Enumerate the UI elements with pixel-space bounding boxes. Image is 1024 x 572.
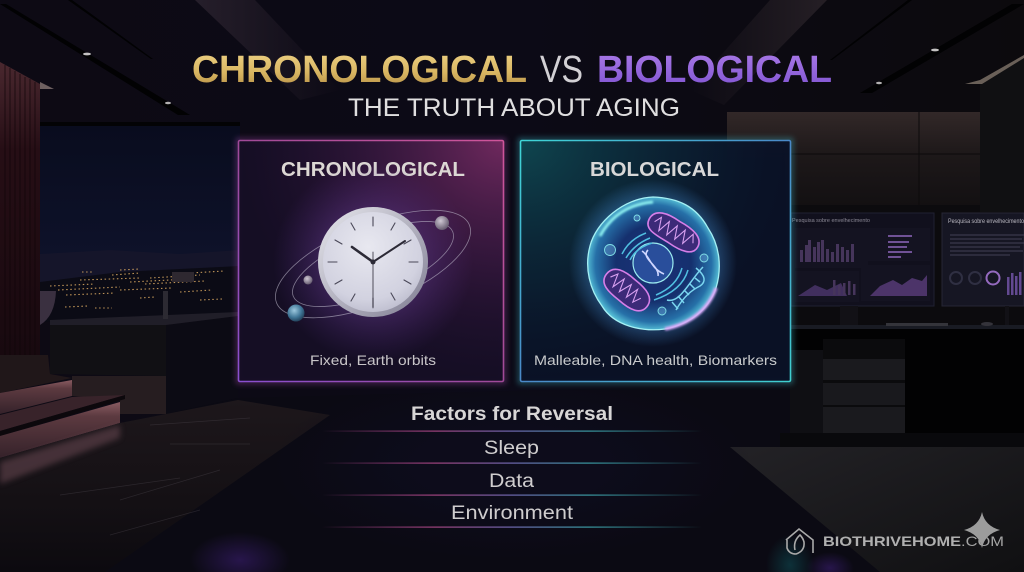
title: VS (540, 49, 583, 91)
factors heading: Factors for Reversal (411, 404, 613, 425)
distant hills (40, 250, 240, 285)
basin (40, 291, 56, 325)
city building glow (172, 272, 194, 282)
brand name: BIOTHRIVEHOME (823, 533, 961, 549)
window with night sky (40, 125, 240, 320)
city dark ground (40, 266, 240, 322)
title (192, 49, 832, 91)
city lights (50, 269, 225, 308)
brand domain: .COM (961, 533, 1004, 549)
mitochondrion lower (598, 264, 656, 316)
right wall (727, 112, 980, 220)
title: CHRONOLOGICAL (192, 49, 527, 91)
marble veins (60, 418, 250, 535)
marble counter (50, 291, 238, 414)
subtitle: THE TRUTH ABOUT AGING (348, 94, 680, 122)
mitochondrion upper (643, 208, 705, 256)
drawers (790, 339, 905, 433)
nucleus (633, 243, 673, 283)
violet floor reflection (806, 552, 854, 572)
lit stairs (0, 380, 125, 458)
left ceiling recessed strips (0, 0, 190, 115)
stair floor reflection (0, 425, 120, 484)
logo (786, 512, 1004, 554)
panel: chronological (238, 140, 504, 382)
factors list (322, 404, 702, 528)
icon: leaf house (786, 529, 813, 554)
floor band behind rug (780, 433, 1024, 447)
tier floor beside column (0, 355, 72, 393)
fluted maroon column (0, 62, 40, 355)
desk with keyboard (790, 306, 1024, 433)
golgi (622, 233, 688, 300)
factor: data: Data (489, 471, 534, 492)
purple floor reflection (190, 532, 290, 572)
ceiling light wedges (195, 0, 827, 105)
right ceiling recessed strips (830, 0, 1024, 93)
title: BIOLOGICAL (597, 49, 832, 91)
panel caption: chronological: Fixed, Earth orbits (310, 352, 436, 368)
grey rug (730, 447, 1024, 572)
divider rule (322, 526, 702, 528)
icon: clock with orbiting planets (262, 162, 484, 362)
dna strand (667, 267, 704, 310)
factor: environment: Environment (451, 503, 574, 524)
divider rule (322, 494, 702, 496)
dark floor (0, 384, 1024, 572)
monitor right (942, 213, 1024, 306)
divider rule (322, 430, 702, 432)
centre list shading (272, 370, 752, 560)
monitor left: Pesquisa sobre envelhecimento (792, 218, 870, 224)
vesicles (604, 215, 708, 315)
panel: biological (520, 140, 791, 382)
teal floor reflection (766, 535, 814, 572)
icon: glowing cell (569, 179, 737, 347)
factor: sleep: Sleep (484, 438, 539, 459)
dark marble pillar (980, 56, 1024, 212)
marble floor panel (0, 400, 330, 572)
panel heading: biological: BIOLOGICAL (590, 159, 719, 181)
panel heading: chronological: CHRONOLOGICAL (281, 159, 465, 181)
monitor left (791, 213, 934, 306)
divider rule (322, 462, 702, 464)
icon: sparkle (964, 512, 1000, 548)
panel caption: biological: Malleable, DNA health, Biomarkers (534, 352, 777, 368)
